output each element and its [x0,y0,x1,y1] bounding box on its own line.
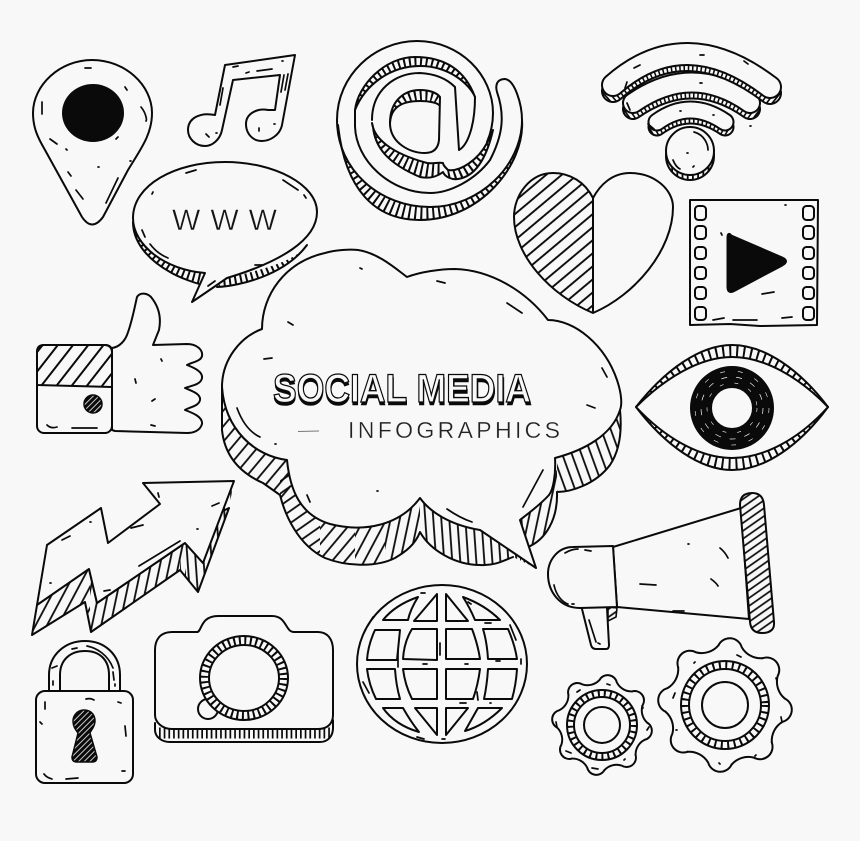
film tick marks [713,205,792,320]
arrow tick marks [50,493,219,591]
globe tick marks [363,593,521,739]
www label: WWW [172,204,278,237]
small gear tick marks [556,684,649,769]
bubble tick marks [142,170,306,286]
bubble hatching left [136,235,204,281]
eyelid rungs [650,351,816,464]
lock tick marks [40,646,126,779]
thumb tick marks [47,359,162,428]
cloud extrusion outline [222,387,621,565]
bubble face [133,162,317,302]
film frame [690,200,818,326]
megaphone rear [548,546,617,608]
camera base hatching [159,728,331,738]
large gear ring [681,661,769,749]
arrow extrusion outline [32,508,229,635]
shackle [49,641,120,691]
heart outline [514,173,673,313]
main speech cloud [215,250,627,570]
icon: thumbs up [37,294,202,433]
upper band [355,57,475,110]
large gear tick marks [673,655,782,764]
heart hatching [515,174,592,310]
megaphone tick marks [554,544,728,644]
small gear hub [584,707,620,743]
cloud extrusion hatching [223,407,620,565]
thumb hand [112,294,202,433]
megaphone cone [613,508,749,619]
lens [200,636,288,720]
camera body [155,616,333,729]
camera extrusion [155,720,333,742]
shutter button [198,699,218,719]
title: social media: SOCIAL MEDIA [273,370,532,414]
icon: padlock [36,641,133,783]
subtitle: infographics: INFOGRAPHICS [348,417,560,443]
wrist cuff [37,345,112,433]
icon: speech bubble www [133,162,317,302]
cuff hatching [37,345,112,387]
at symbol bowl [390,90,440,153]
megaphone bell [740,493,774,633]
top arc [613,60,770,93]
icon: location pin [33,60,152,224]
play triangle [728,234,786,292]
icon: film strip with play button [690,200,818,326]
bubble hatching right [218,254,298,286]
icon: eye [636,345,828,470]
outer extrusion rungs [346,156,514,219]
globe grid cells [367,594,517,735]
icon: half-hatched heart [510,170,673,316]
keyhole [72,710,97,762]
large gear hub [702,682,748,728]
lock body [36,691,133,783]
small gear teeth [547,670,657,780]
signal dot extrusion [666,132,714,180]
title: social media: SOCIAL MEDIA [273,367,531,411]
icon: megaphone [548,493,774,649]
icon: growth arrow [30,480,235,640]
wifi tick marks [625,55,751,169]
megaphone handle [582,608,609,649]
inner ring line [355,79,505,193]
eye white [636,357,828,458]
megaphone clip [608,607,617,621]
bubble extrusion [133,222,307,287]
icon: large gear [652,632,798,778]
subtitle rule [298,430,319,432]
arrow face [37,481,234,605]
outer ring [337,41,522,207]
outer extrusion [338,120,522,220]
iris [701,377,763,439]
lower arc [657,115,725,127]
icon: camera [155,616,333,742]
arrow extrusion hatching [34,490,232,632]
icon: music note [188,55,295,146]
eye outline [636,345,828,470]
cuff button [84,395,102,413]
at symbol body [372,73,475,150]
cloud face [222,250,621,568]
middle arc [633,88,750,109]
icon: wifi signal [600,54,783,180]
signal dot [666,127,714,175]
cloud tick marks [237,268,607,522]
lower band [372,123,493,179]
globe outline [357,585,527,743]
small gear ring [567,690,637,760]
icon: globe [357,585,527,743]
icon: small gear [547,670,657,780]
icon: at sign [337,41,523,220]
film holes [695,206,814,320]
large gear teeth [652,632,798,778]
